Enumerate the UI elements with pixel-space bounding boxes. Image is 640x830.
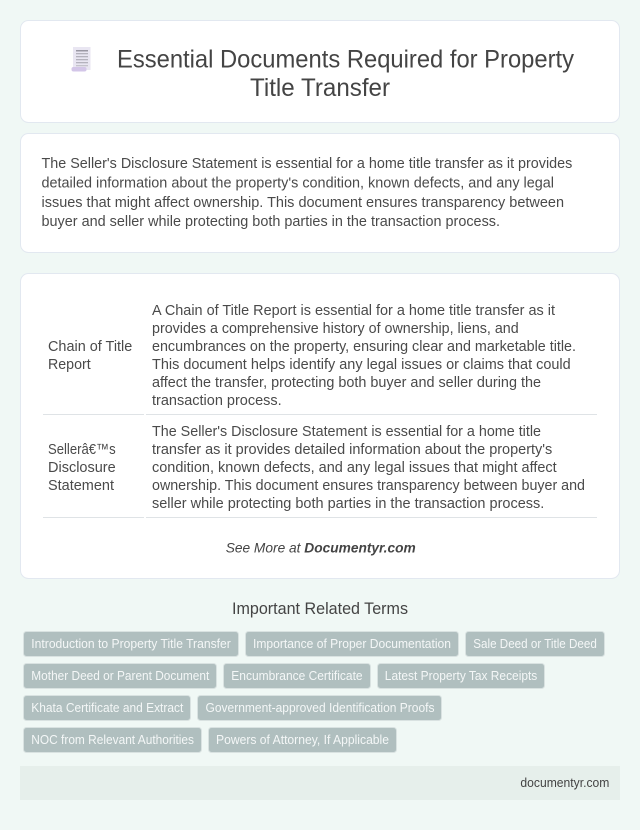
table row: Chain of Title Report: provides a comprehensive history of ownership, liens, and: [152, 321, 519, 337]
table row: Chain of Title Report: A Chain of Title Report is essential for a home title transfer as it: [152, 303, 555, 319]
tag list: related terms: [24, 632, 604, 752]
table row: Seller's Disclosure Statement: [43, 424, 597, 518]
intro paragraph: detailed information about the property's condition, known defects, and any legal: [42, 175, 554, 191]
table row: Seller's Disclosure Statement: Statement: [48, 478, 114, 494]
tag: [24, 728, 202, 752]
intro paragraph: [42, 156, 572, 230]
table row: Chain of Title Report: Chain of Title: [48, 339, 132, 355]
panel: title card: [20, 20, 620, 122]
table row: Chain of Title Report: Report: [48, 357, 91, 373]
intro paragraph: buyer and seller while protecting both parties in the transaction process.: [42, 214, 500, 230]
table row: Seller's Disclosure Statement: Sellerâ€™s: [48, 442, 116, 458]
table row: Chain of Title Report: transaction process.: [152, 393, 282, 409]
tag: [466, 632, 604, 656]
table row: Seller's Disclosure Statement: condition, known defects, and any legal issues that might affect: [152, 460, 557, 476]
see more link: See More at Documentyr.com: [226, 540, 416, 556]
tag: Powers of Attorney, If Applicable: [216, 733, 389, 747]
tag: Sale Deed or Title Deed: [473, 637, 597, 651]
panel: documents table card: [20, 274, 620, 578]
table row: Seller's Disclosure Statement: The Seller's Disclosure Statement is essential for a home title: [152, 424, 541, 440]
table row: Seller's Disclosure Statement: seller while protecting both parties in the transaction process.: [152, 496, 544, 512]
tag: Government-approved Identification Proofs: [206, 701, 434, 715]
tag: [246, 632, 458, 656]
table row: Chain of Title Report: This document helps identify any legal issues or claims that could: [152, 357, 571, 373]
title: [117, 46, 574, 102]
tag: Introduction to Property Title Transfer: [31, 637, 231, 651]
heading: important related terms: Important Related Terms: [232, 600, 408, 618]
tag: NOC from Relevant Authorities: [31, 733, 194, 747]
panel: intro text card: [20, 134, 620, 252]
intro paragraph: The Seller's Disclosure Statement is essential for a home title transfer as it provides: [42, 156, 572, 172]
tag: [208, 728, 396, 752]
footer: [20, 766, 620, 800]
tag: [224, 664, 370, 688]
table row: Chain of Title Report: [43, 303, 597, 415]
tag: [24, 632, 238, 656]
footer: documentyr.com: [520, 776, 609, 790]
tag: [378, 664, 544, 688]
tag: Latest Property Tax Receipts: [385, 669, 537, 683]
icon: document scroll: [72, 47, 90, 72]
tag: [24, 696, 190, 720]
table row: Chain of Title Report: affect the transfer, protecting both buyer and seller during the: [152, 375, 541, 391]
tag: [198, 696, 442, 720]
tag: Mother Deed or Parent Document: [31, 669, 210, 683]
tag: Khata Certificate and Extract: [31, 701, 184, 715]
title: Essential Documents Required for Property: [117, 46, 574, 74]
table row: Chain of Title Report: encumbrances on the property, ensuring clear and marketable title.: [152, 339, 576, 355]
intro paragraph: issues that might affect ownership. This document ensures transparency between: [42, 195, 564, 211]
tag: Encumbrance Certificate: [231, 669, 363, 683]
title: Title Transfer: [250, 74, 390, 102]
tag: [24, 664, 216, 688]
tag: Importance of Proper Documentation: [253, 637, 451, 651]
table row: Seller's Disclosure Statement: Disclosure: [48, 460, 116, 476]
table row: Seller's Disclosure Statement: transfer as it provides detailed information about the property's: [152, 442, 552, 458]
table row: Seller's Disclosure Statement: ownership. This document ensures transparency between buyer and: [152, 478, 585, 494]
